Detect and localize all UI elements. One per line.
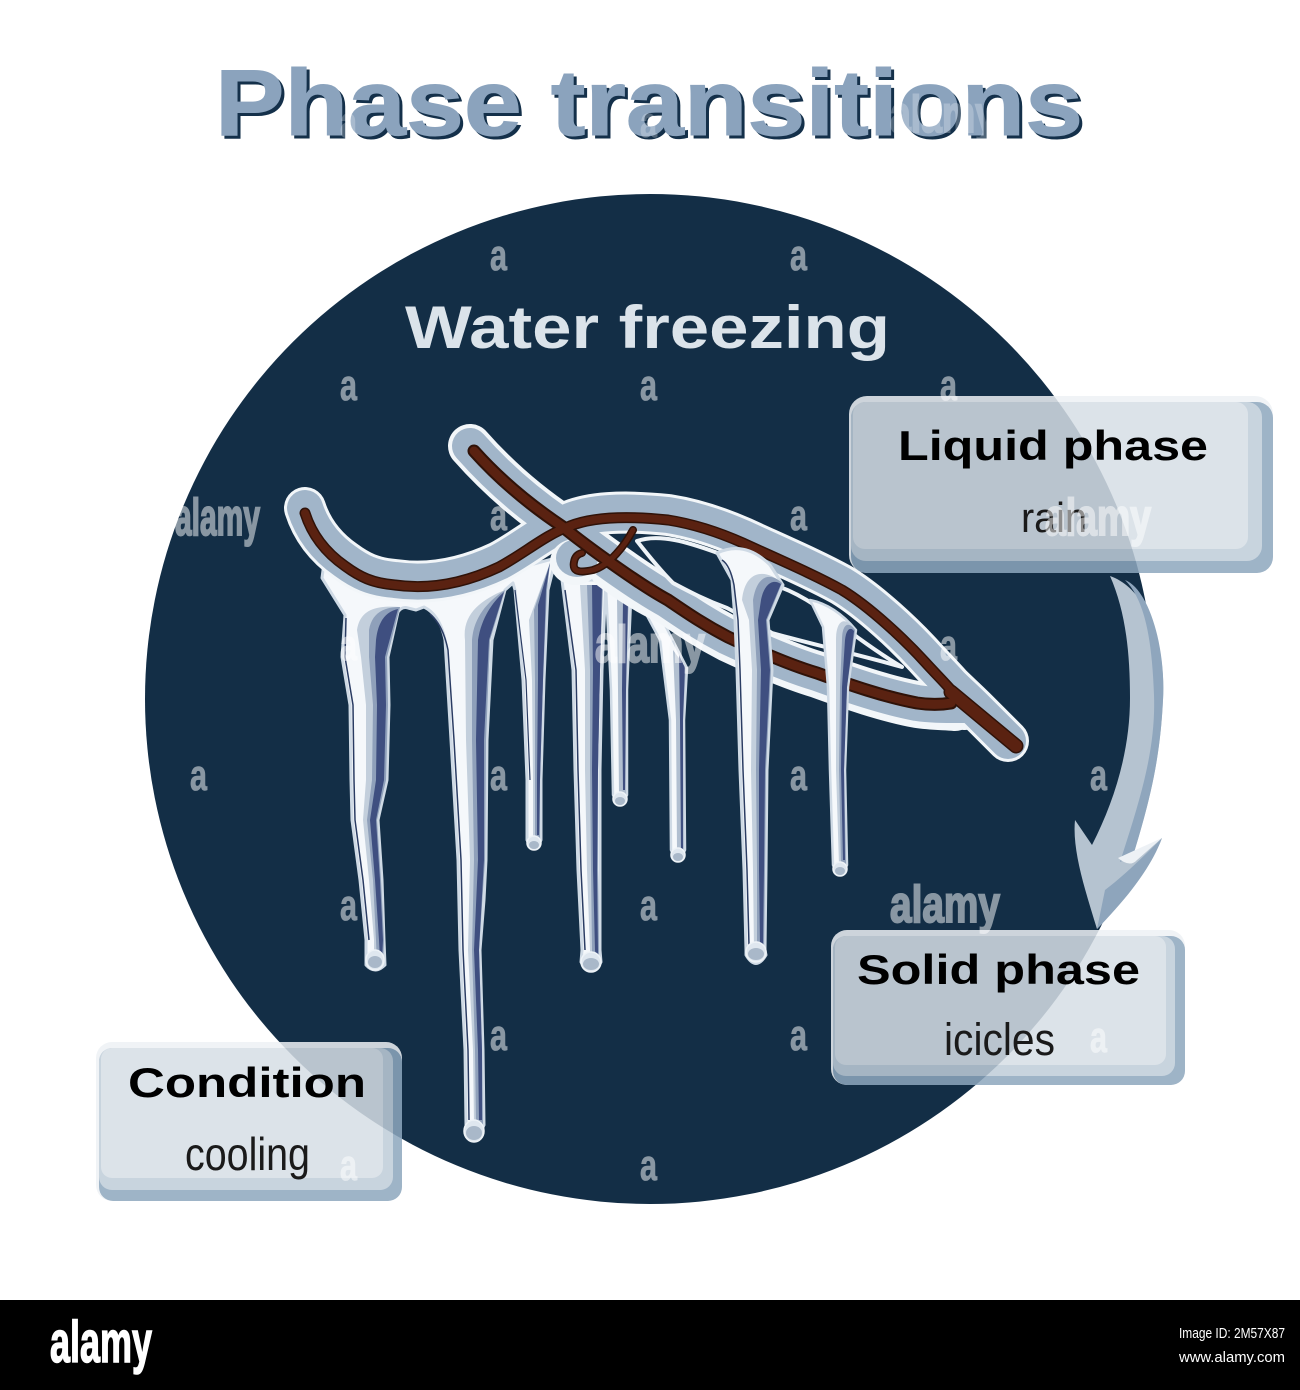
card: condition (96, 1042, 402, 1201)
icicles 1 to 3 with connecting ice web (322, 555, 556, 1136)
watermarks: a (490, 491, 507, 540)
watermarks: a (640, 98, 657, 147)
condition heading: Condition (128, 1059, 366, 1106)
card: liquid phase (849, 396, 1273, 573)
watermarks (175, 86, 1151, 1190)
title: Phase transitions (218, 53, 1086, 158)
watermarks: a (490, 1011, 507, 1060)
icicle 4 (562, 580, 606, 971)
twig: brown branches (305, 451, 1016, 746)
watermarks: a (1090, 1013, 1107, 1062)
footer logo: alamy (50, 1310, 152, 1375)
watermarks: a (1090, 751, 1107, 800)
solid phase value: icicles (944, 1014, 1055, 1065)
watermarks: a (790, 751, 807, 800)
watermarks: a (490, 751, 507, 800)
footer url: www.alamy.com (1178, 1349, 1285, 1366)
subtitle: water freezing: Water freezing (405, 294, 890, 361)
arrow: liquid to solid (1075, 576, 1163, 929)
watermarks: a (940, 621, 957, 670)
watermarks: a (190, 751, 207, 800)
icicle 5 (606, 588, 631, 802)
watermarks: a (940, 361, 957, 410)
watermarks: a (340, 881, 357, 930)
watermarks: alamy (175, 489, 260, 547)
liquid phase value: rain (1021, 494, 1087, 541)
illustration: icy twig with icicles (305, 446, 1016, 1142)
icicle 7 (717, 549, 783, 964)
card: solid phase (831, 930, 1185, 1085)
watermarks: a (340, 621, 357, 670)
liquid phase heading: Liquid phase (898, 422, 1208, 469)
watermarks: a (340, 98, 357, 147)
watermarks: a (340, 361, 357, 410)
watermarks: a (790, 491, 807, 540)
watermarks: alamy (890, 876, 1000, 934)
watermarks: a (340, 1141, 357, 1190)
icicle drop tips (366, 792, 847, 1142)
watermarks: a (790, 231, 807, 280)
solid phase heading: Solid phase (857, 946, 1140, 993)
watermarks: a (640, 361, 657, 410)
footer bar (0, 1300, 1300, 1390)
background circle (145, 194, 1155, 1204)
watermarks: a (640, 881, 657, 930)
watermarks: alamy (890, 86, 996, 144)
icicle 8 (810, 600, 856, 874)
watermarks: a (490, 231, 507, 280)
condition value: cooling (185, 1128, 310, 1180)
watermarks: alamy (595, 616, 705, 674)
watermarks: a (790, 1011, 807, 1060)
watermarks: a (640, 1141, 657, 1190)
gap in the twig fork (637, 538, 902, 667)
watermarks: alamy (1045, 489, 1151, 547)
ice knot at the fork (550, 539, 600, 585)
ice coating on twig: outline (305, 446, 1008, 741)
ice coating on twig: blue (305, 446, 1008, 741)
icicle 6 (645, 612, 687, 858)
title: Phase transitions (215, 50, 1083, 155)
